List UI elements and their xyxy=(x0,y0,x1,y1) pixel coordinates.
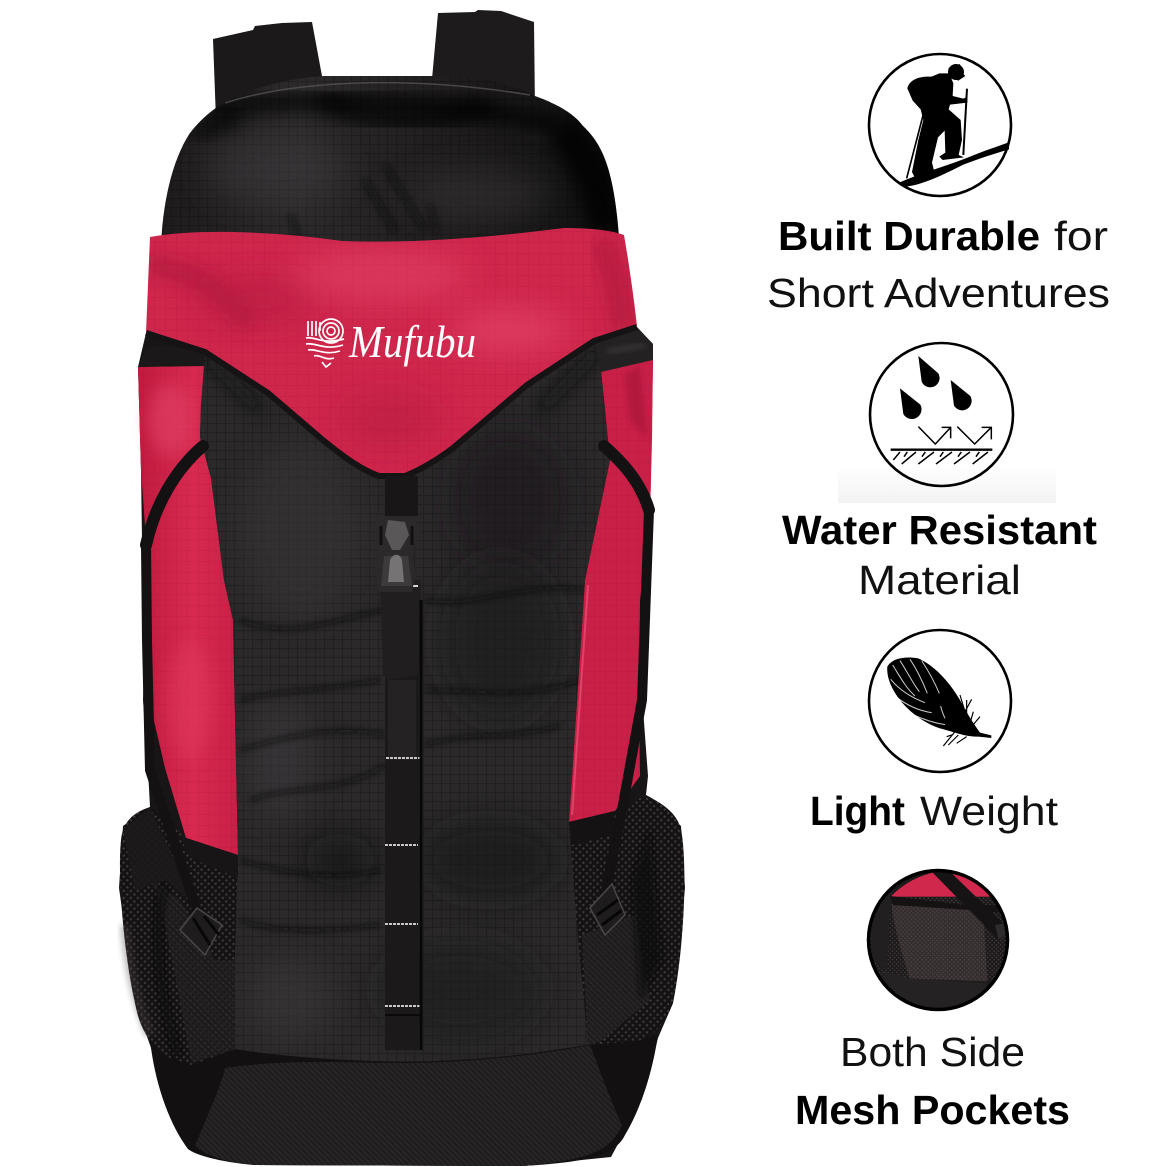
text: Both Side: Both Side xyxy=(840,1029,1025,1075)
icon: feather in circle xyxy=(869,630,1011,772)
top roll collar xyxy=(160,76,620,251)
base panel xyxy=(150,1035,658,1166)
pocket top gathers xyxy=(138,328,653,372)
heading: Light Weight: Light xyxy=(810,788,905,834)
red upper panel xyxy=(146,228,638,478)
icon background haze xyxy=(838,465,1056,503)
heading: Water Resistant: Water Resistant xyxy=(782,507,1097,553)
icon: mesh pocket close-up xyxy=(867,868,1010,1012)
right strap adjuster xyxy=(590,884,625,935)
feature 3: light weight xyxy=(810,630,1059,834)
text: Short Adventures: Short Adventures xyxy=(767,270,1110,316)
binding edge xyxy=(146,327,637,476)
central black panel xyxy=(200,340,612,1070)
icon: water drops on surface xyxy=(870,343,1013,486)
central webbing strap xyxy=(380,476,421,1050)
heading: Built Durable for: Built Durable xyxy=(778,213,1040,259)
heading: Built Durable for: for xyxy=(1054,213,1108,259)
plastic side-release buckle xyxy=(373,516,420,592)
body silhouette backing xyxy=(119,300,685,1166)
logo wordmark: Mufubu xyxy=(348,316,476,367)
feature 1: durable xyxy=(767,54,1110,316)
heading: Light Weight: Weight xyxy=(920,788,1059,834)
right mesh pocket xyxy=(569,795,684,1045)
icon: hiker in circle xyxy=(869,54,1011,196)
heading: Mesh Pockets: Mesh Pockets xyxy=(795,1087,1070,1133)
left strap adjuster xyxy=(180,908,222,955)
right red side panel xyxy=(569,359,653,822)
feature 4: mesh pockets xyxy=(795,868,1070,1133)
text: Material: Material xyxy=(858,557,1021,603)
left red side panel xyxy=(138,365,238,855)
backpack photo xyxy=(119,10,685,1166)
feature 2: water resistant xyxy=(782,343,1097,603)
shoulder straps xyxy=(213,10,535,120)
logo mark xyxy=(306,319,344,367)
side compression straps xyxy=(146,446,649,935)
heading: Light Weight xyxy=(810,788,1059,834)
left mesh pocket xyxy=(120,807,238,1065)
logo: Mufubu xyxy=(306,316,476,367)
